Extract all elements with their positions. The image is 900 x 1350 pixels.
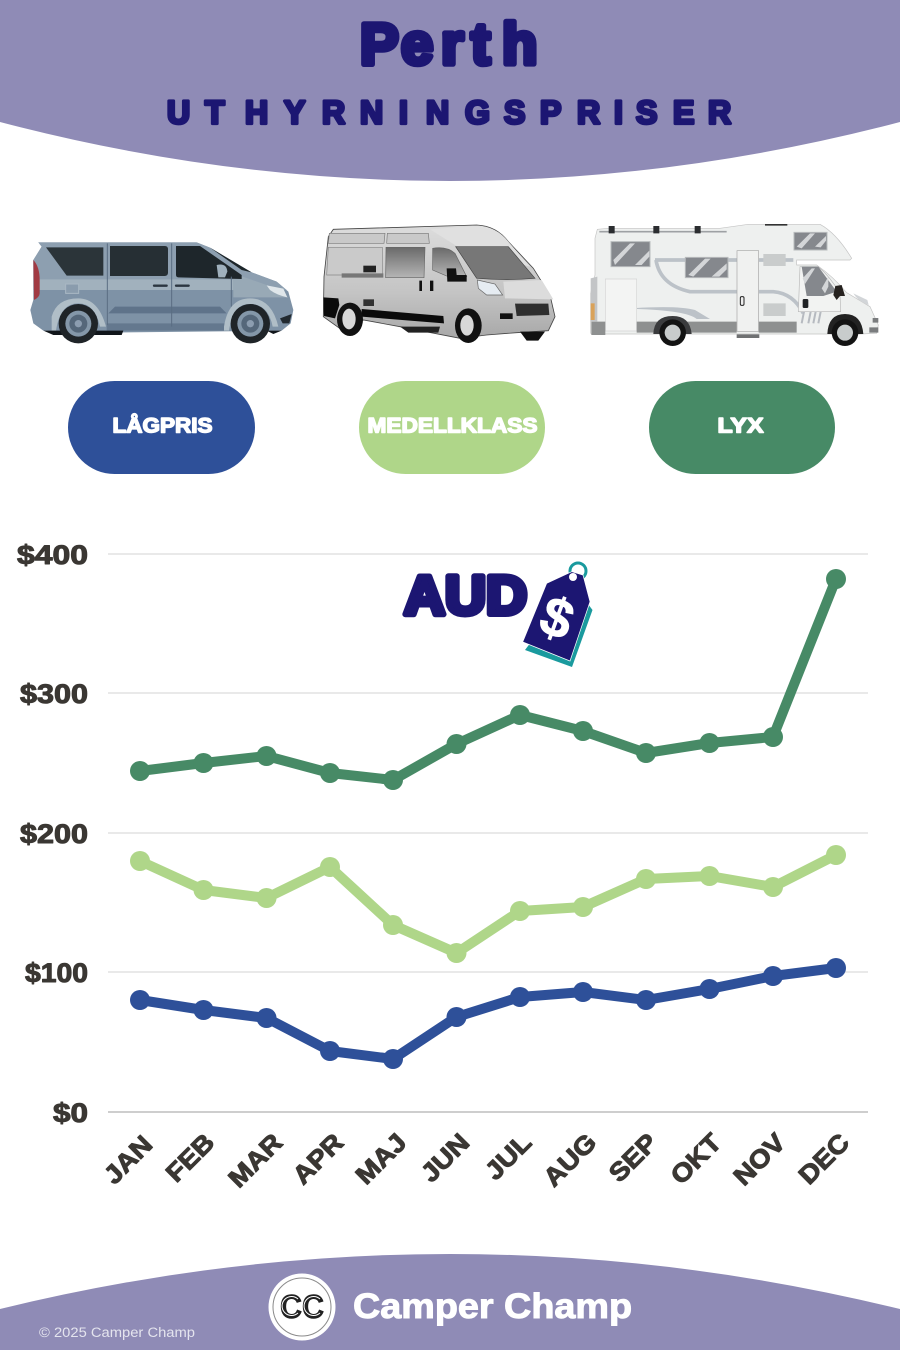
line chart [17,540,868,1193]
brand name: Camper Champ [353,1287,632,1326]
y-axis labels: $400 [17,540,88,570]
icon: price tag: $ [532,583,582,652]
y-axis labels: $100 [25,958,88,988]
x-axis labels: AUG [538,1128,602,1192]
x-axis labels: NOV [728,1128,791,1191]
x-axis labels: SEP [603,1128,663,1188]
x-axis labels: JAN [98,1130,158,1190]
icon: price tag [523,563,592,667]
currency label: AUD: AUD [404,564,527,626]
x-axis labels: APR [287,1128,349,1190]
logo: CC [280,1288,324,1325]
copyright: © 2025 Camper Champ [39,1325,195,1340]
x-axis labels: JUL [479,1128,537,1185]
header banner [0,0,900,181]
button: luxury [649,381,835,474]
footer banner [0,1254,900,1350]
button: mid-range [359,381,545,474]
y-axis labels [17,540,88,1128]
button: luxury: LYX [718,414,764,438]
x-axis labels: FEB [160,1128,220,1188]
button: mid-range: MEDELLKLASS [368,414,538,438]
icon: mid-range van [323,225,555,343]
x-axis labels: MAJ [350,1128,412,1190]
y-axis labels: $300 [20,679,88,709]
icon: luxury motorhome [591,224,878,346]
y-axis labels: $200 [20,819,88,849]
series: mid-range [130,845,846,963]
series: budget [130,958,846,1069]
x-axis labels [98,1127,855,1193]
logo [268,1274,336,1340]
title: Perth [360,12,537,77]
button: budget [68,381,255,474]
x-axis labels: MAR [223,1128,288,1193]
icon: budget minivan [30,242,293,343]
button: budget: LÅGPRIS [112,412,212,438]
series: luxury [130,569,846,790]
y-axis labels: $0 [53,1098,88,1128]
x-axis labels: DEC [793,1128,855,1190]
x-axis labels: JUN [415,1128,475,1188]
x-axis labels: OKT [665,1127,727,1190]
subtitle: UTHYRNINGSPRISER [167,94,731,130]
